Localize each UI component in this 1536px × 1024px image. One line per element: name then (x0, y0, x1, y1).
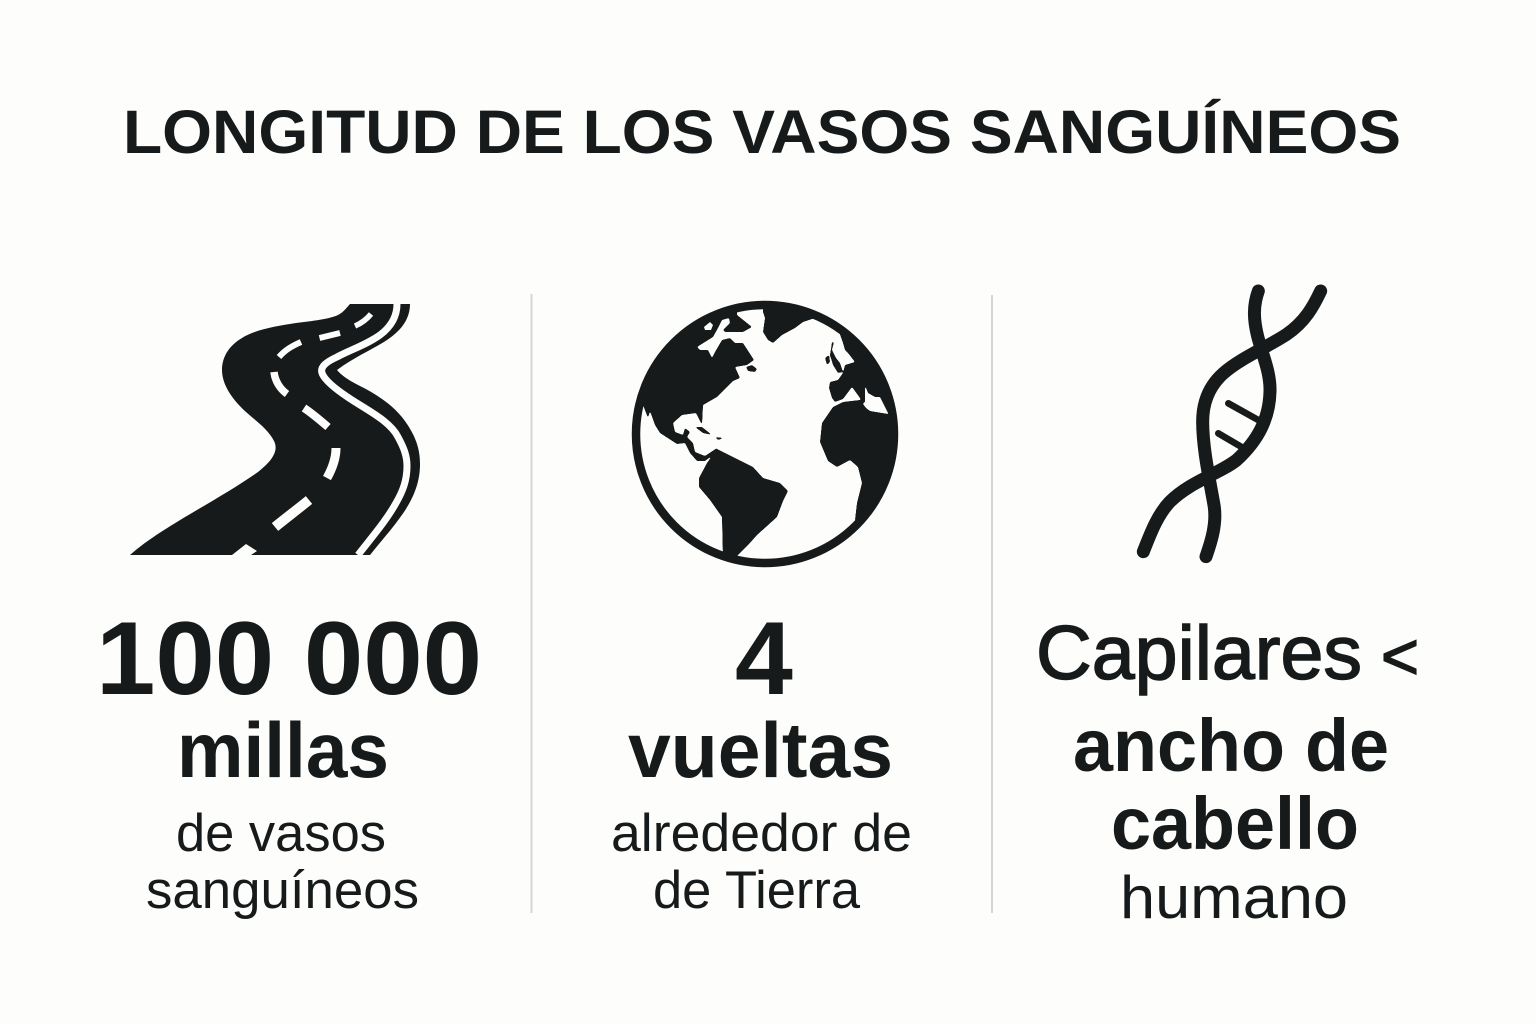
panel: 100 000 miles (96, 304, 482, 920)
caribbean islands (696, 427, 710, 434)
divider left (530, 294, 532, 913)
white edge line (322, 304, 407, 555)
newfoundland (746, 365, 757, 372)
icon: globe (632, 300, 898, 568)
south america (699, 449, 788, 560)
caption: humano: humano (1120, 864, 1348, 931)
heading line 1: < (1381, 619, 1419, 693)
lane dashes (355, 314, 371, 326)
heading line 2: ancho de (1073, 704, 1389, 787)
title: LONGITUD DE LOS VASOS SANGUÍNEOS (123, 98, 1401, 166)
caption line 1: de vasos (176, 804, 386, 863)
caption line 2: sanguíneos (146, 861, 419, 920)
unit: vueltas: vueltas (628, 706, 893, 794)
icon: dna helix (1143, 291, 1321, 557)
british isles (825, 355, 830, 365)
caption line 2: de Tierra (653, 861, 861, 920)
stat: 100 000: 100 000 (96, 601, 482, 717)
caption line 1: alrededor de (611, 804, 912, 863)
heading line 3: cabello (1111, 782, 1359, 865)
icon: winding road (130, 304, 420, 555)
heading line 1: Capilares (1036, 611, 1362, 696)
europe and asia (829, 334, 888, 414)
stat: 4: 4 (735, 601, 793, 717)
unit: millas: millas (177, 706, 389, 794)
north and central america (644, 312, 754, 461)
scandinavia (830, 342, 843, 373)
greenland (763, 309, 813, 342)
arctic island (704, 322, 713, 330)
panel: 4 laps (611, 285, 912, 920)
panel: capillaries (1036, 291, 1419, 931)
globe outline (636, 305, 894, 563)
divider right (991, 295, 993, 913)
africa (820, 398, 890, 520)
